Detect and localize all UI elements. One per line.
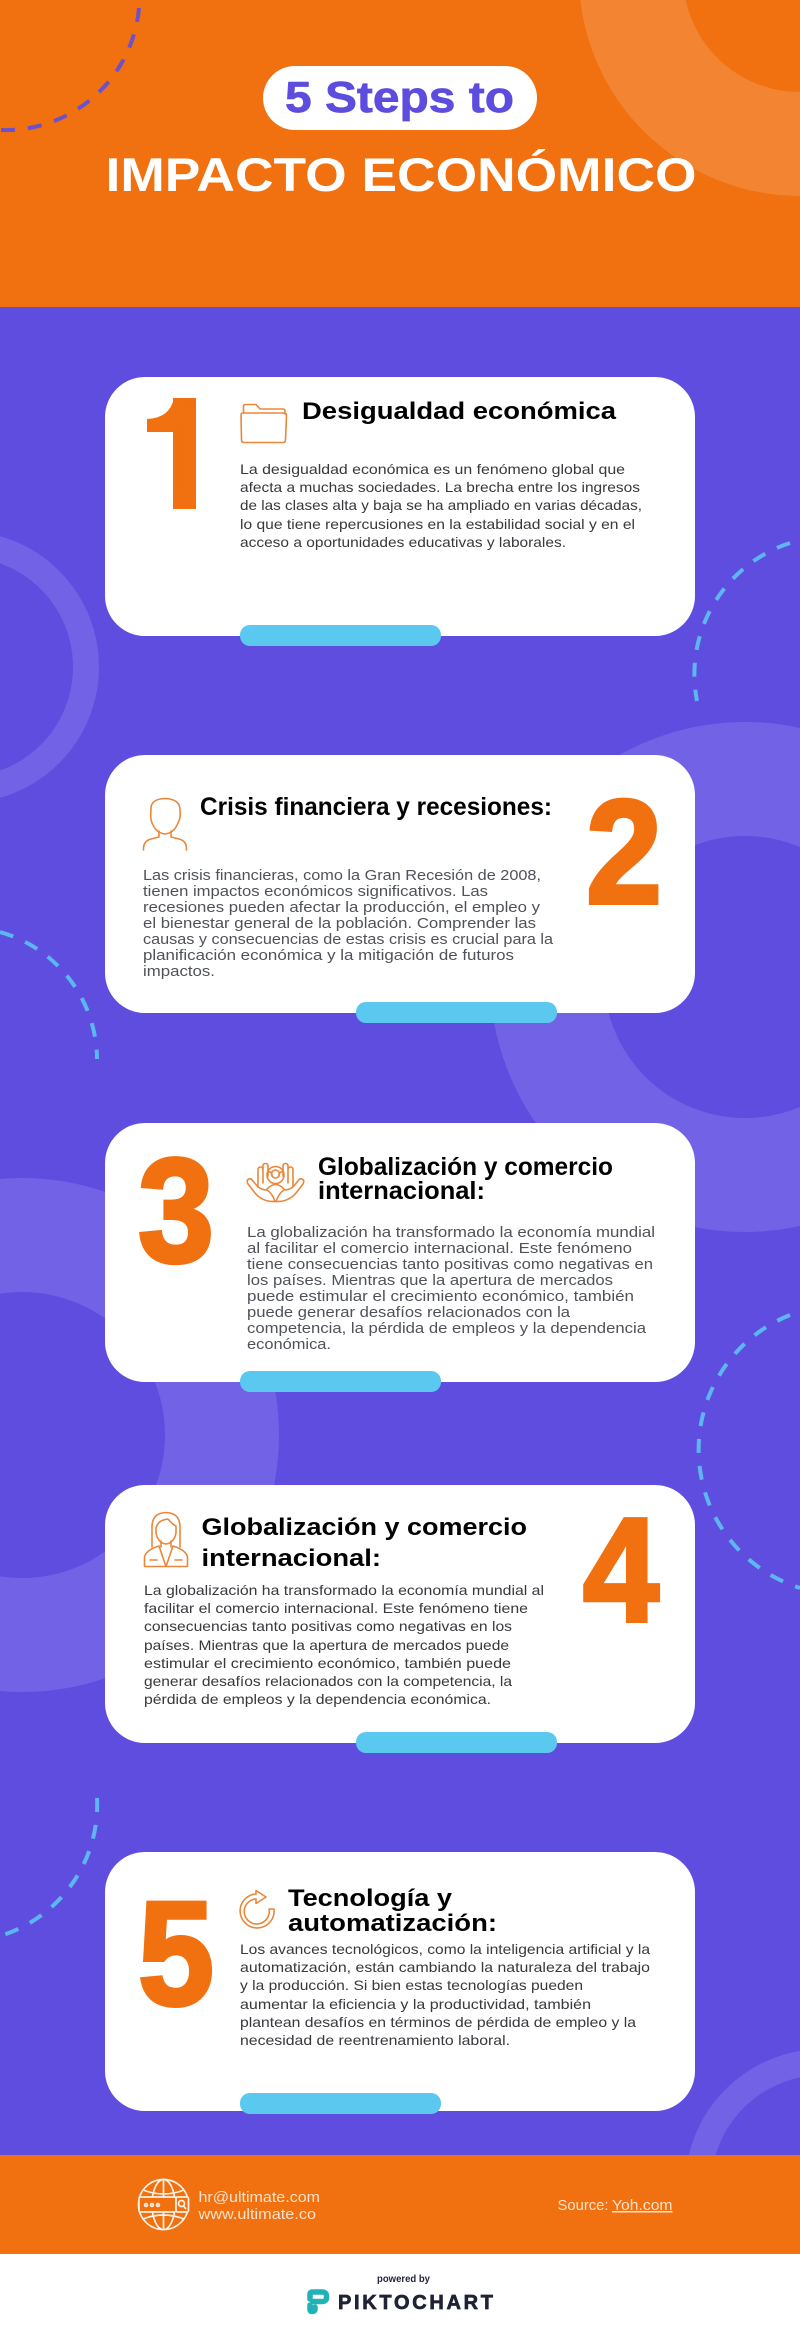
source credit: Source:	[558, 2197, 608, 2214]
body text: los países. Mientras que la apertura de mercados	[247, 1272, 613, 1289]
icon: person	[143, 798, 187, 850]
heading	[318, 1153, 613, 1205]
panel: step 5	[105, 1852, 695, 2114]
body text: al facilitar el comercio internacional. Este fenómeno	[247, 1240, 632, 1257]
contact details: www.ultimate.co	[197, 2206, 316, 2223]
icon: hands holding person	[247, 1164, 304, 1202]
body text: tiene consecuencias tanto positivas como negativas en	[247, 1256, 653, 1273]
accent pill	[240, 1371, 441, 1392]
branding: powered by Piktochart: powered by	[377, 2273, 430, 2285]
body text: y la producción. Si bien estas tecnologías pueden	[240, 1977, 583, 1993]
icon: folder	[241, 404, 286, 442]
body text: estimular el crecimiento económico, también puede	[144, 1655, 511, 1671]
body text: competencia, la pérdida de empleos y la dependencia	[247, 1320, 647, 1337]
heading: Crisis financiera y recesiones:	[200, 793, 552, 821]
body text: Los avances tecnológicos, como la inteligencia artificial y la	[240, 1941, 650, 1957]
body text	[240, 1941, 650, 2048]
body text	[247, 1224, 655, 1353]
heading: Desigualdad económica	[302, 398, 617, 425]
icon: globe with search bar	[138, 2180, 188, 2230]
body text	[144, 1582, 544, 1707]
heading	[202, 1514, 527, 1572]
heading	[288, 1885, 497, 1937]
accent pill	[240, 2093, 441, 2114]
body text: plantean desafíos en términos de pérdida de empleo y la	[240, 2014, 636, 2030]
icon: Piktochart logo	[310, 2292, 326, 2312]
source credit	[558, 2197, 672, 2214]
body text: puede estimular el crecimiento económico, también	[247, 1288, 634, 1305]
accent pill	[356, 1002, 557, 1023]
main title: IMPACTO ECONÓMICO	[106, 148, 696, 201]
heading: internacional:	[202, 1545, 381, 1572]
body text: La globalización ha transformado la economía mundial	[247, 1224, 655, 1241]
contact details	[197, 2189, 320, 2223]
number 4: 4	[583, 1488, 659, 1653]
body text: planificación económica y la mitigación de futuros	[143, 947, 514, 964]
body text: automatización, están cambiando la naturaleza del trabajo	[240, 1959, 650, 1975]
panel: step 2	[105, 755, 695, 1023]
title pill: 5 Steps to: 5 Steps to	[285, 73, 514, 122]
body text: facilitar el comercio internacional. Este fenómeno tiene	[144, 1600, 528, 1616]
panel: step 1	[105, 374, 695, 646]
body text: generar desafíos relacionados con la competencia, la	[144, 1673, 512, 1689]
body text: La desigualdad económica es un fenómeno global que	[240, 461, 625, 477]
number 1	[147, 398, 196, 509]
heading: Globalización y comercio	[318, 1153, 613, 1181]
icon: refresh arrows	[240, 1890, 274, 1928]
heading: Tecnología y	[288, 1885, 453, 1912]
body text: países. Mientras que la apertura de mercados puede	[144, 1637, 509, 1653]
body text: de las clases alta y baja se ha ampliado en varias décadas,	[240, 497, 642, 513]
body text: lo que tiene repercusiones en la estabilidad social y en el	[240, 516, 635, 532]
number 3: 3	[138, 1128, 214, 1294]
accent pill	[240, 625, 441, 646]
accent pill	[356, 1732, 557, 1753]
contact details: hr@ultimate.com	[198, 2189, 320, 2206]
body text: puede generar desafíos relacionados con la	[247, 1304, 571, 1321]
body text: impactos.	[143, 963, 215, 980]
panel: step 4	[105, 1485, 695, 1753]
body text: el bienestar general de la población. Comprender las	[143, 915, 536, 932]
icon: woman	[144, 1512, 188, 1566]
body text: Las crisis financieras, como la Gran Recesión de 2008,	[143, 867, 541, 884]
branding: powered by Piktochart	[0, 2254, 800, 2334]
footer band	[0, 2155, 800, 2254]
header band	[0, 0, 800, 307]
body text: económica.	[247, 1336, 331, 1353]
body text: pérdida de empleos y la dependencia económica.	[144, 1691, 491, 1707]
body text: recesiones pueden afectar la producción, el empleo y	[143, 899, 541, 916]
title pill: 5 Steps to	[263, 66, 537, 130]
body text: tienen impactos económicos significativos. Las	[143, 883, 488, 900]
body text: necesidad de reentrenamiento laboral.	[240, 2032, 510, 2048]
heading: Globalización y comercio	[202, 1514, 527, 1541]
body text: consecuencias tanto positivas como negativas en los	[144, 1618, 512, 1634]
number 2: 2	[586, 770, 662, 935]
panel: step 3	[105, 1123, 695, 1392]
body text	[240, 461, 642, 550]
body text: afecta a muchas sociedades. La brecha entre los ingresos	[240, 479, 640, 495]
body text: acceso a oportunidades educativas y laborales.	[240, 534, 566, 550]
number 5: 5	[138, 1872, 214, 2036]
body text: aumentar la eficiencia y la productividad, también	[240, 1996, 591, 2012]
number 1: 1	[144, 374, 226, 539]
source credit: Yoh.com	[612, 2197, 672, 2214]
branding: powered by Piktochart: PIKTOCHART	[338, 2292, 493, 2314]
body text: causas y consecuencias de estas crisis es crucial para la	[143, 931, 554, 948]
heading: internacional:	[318, 1177, 485, 1205]
heading: automatización:	[288, 1910, 497, 1937]
body text	[143, 867, 554, 980]
body text: La globalización ha transformado la economía mundial al	[144, 1582, 544, 1598]
